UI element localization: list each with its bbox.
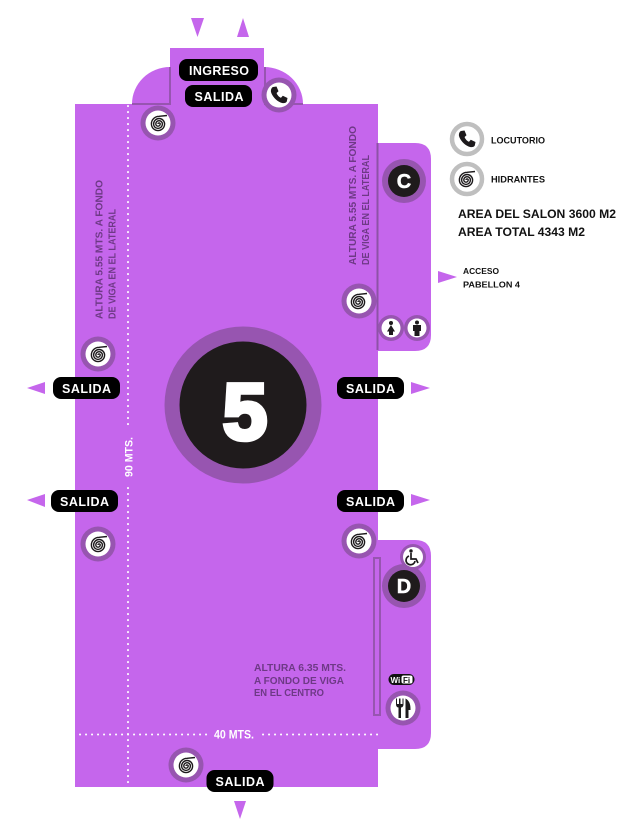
label: salida bottom <box>206 770 274 792</box>
access label: PABELLON 4 <box>463 280 520 290</box>
access label: ACCESO <box>463 266 499 276</box>
arrow: bottom <box>234 801 246 819</box>
arrow: entry down <box>191 18 204 37</box>
icon: wheelchair <box>400 544 426 570</box>
sector D: D <box>397 576 411 598</box>
note: center height: ALTURA 6.35 MTS. <box>254 662 346 674</box>
icon: hydrant left lower <box>80 526 116 562</box>
dimension: 40 mts: 40 MTS. <box>214 730 254 742</box>
label: ingreso: INGRESO <box>189 64 249 78</box>
icon: wifi <box>388 674 414 685</box>
legend: hidrantes <box>452 164 545 194</box>
note: right height: DE VIGA EN EL LATERAL <box>360 155 372 265</box>
legend: hidrantes: HIDRANTES <box>491 174 545 184</box>
label: ingreso <box>179 59 258 81</box>
icon: hydrant right upper <box>342 284 376 318</box>
area figures: AREA DEL SALON 3600 M2 <box>458 207 616 221</box>
note: center height: EN EL CENTRO <box>254 687 324 699</box>
label: salida top <box>185 85 252 107</box>
icon: hydrant right lower <box>342 524 376 558</box>
arrow: right lower <box>411 494 430 506</box>
label: salida right upper <box>337 377 404 399</box>
label: salida bottom: SALIDA <box>216 775 264 789</box>
arrow: exit up <box>237 18 249 37</box>
dimension: 90 mts: 90 MTS. <box>124 437 136 477</box>
area figures <box>458 207 616 239</box>
label: salida right upper: SALIDA <box>346 382 395 396</box>
icon: women restroom <box>378 315 404 341</box>
icon: hydrant bottom <box>168 748 204 782</box>
icon: men restroom <box>404 315 430 341</box>
label: salida top: SALIDA <box>194 90 244 104</box>
sector D <box>382 564 426 608</box>
note: left height: ALTURA 5.55 MTS. A FONDO <box>94 180 106 319</box>
access label <box>463 266 520 290</box>
legend: locutorio: LOCUTORIO <box>491 136 545 146</box>
label: salida right lower <box>337 490 404 512</box>
sector C: C <box>397 171 411 193</box>
note: left height: DE VIGA EN EL LATERAL <box>106 209 118 319</box>
sector C <box>382 159 426 203</box>
pavilion number 5 <box>164 326 322 484</box>
label: salida right lower: SALIDA <box>346 495 395 509</box>
note: center height <box>254 662 346 699</box>
icon: hydrant top <box>140 106 176 140</box>
icon: phone <box>262 78 296 112</box>
arrow: access <box>438 271 457 283</box>
pavilion number 5: 5 <box>223 367 267 456</box>
arrow: right upper <box>411 382 430 394</box>
legend: locutorio <box>452 124 545 154</box>
icon: restaurant <box>386 690 420 726</box>
arrow: left upper <box>27 382 45 394</box>
icon: wifi: Fi <box>403 676 410 685</box>
note: right height: ALTURA 5.55 MTS. A FONDO <box>347 126 359 265</box>
note: right height <box>347 126 372 265</box>
note: center height: A FONDO DE VIGA <box>254 675 344 687</box>
arrow: left lower <box>27 494 45 507</box>
floor plan: hall 5 <box>75 48 431 787</box>
icon: hydrant left upper <box>80 336 116 372</box>
icon: wifi: Wi <box>390 676 400 685</box>
label: salida left lower <box>51 490 118 512</box>
label: salida left lower: SALIDA <box>60 495 109 509</box>
label: salida left upper: SALIDA <box>62 382 111 396</box>
area figures: AREA TOTAL 4343 M2 <box>458 225 585 239</box>
note: left height <box>94 180 118 319</box>
label: salida left upper <box>53 377 120 399</box>
